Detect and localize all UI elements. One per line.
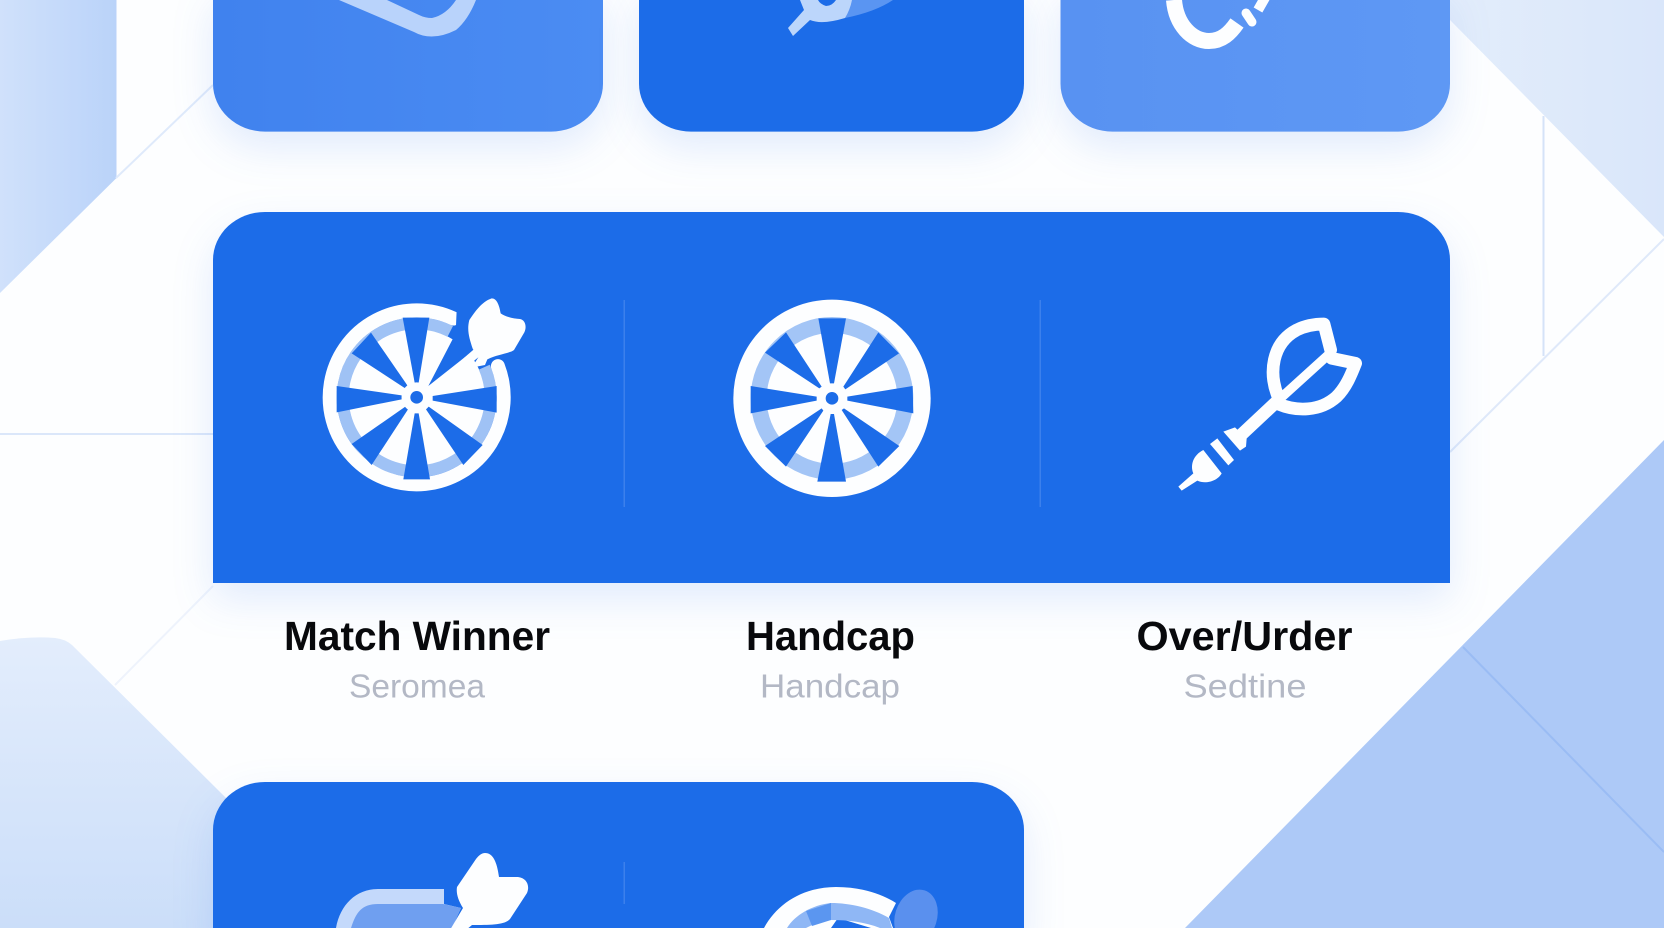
divider: bottom card — [624, 862, 625, 904]
label: Match Winner — [284, 613, 550, 704]
label: Over/Urder: Over/Urder — [1136, 613, 1353, 659]
icon fragment: bottom left dart — [336, 853, 528, 928]
label: Handcap — [746, 613, 915, 704]
panel: bottom market card — [213, 782, 1024, 928]
label: Over/Urder: Sedtine — [1184, 668, 1306, 704]
divider: main card left — [624, 300, 625, 507]
label: Handcap: Handcap — [746, 613, 915, 659]
label: Over/Urder — [1136, 613, 1353, 704]
icon: dartboard with dart — [330, 298, 526, 484]
icon: dartboard — [733, 300, 931, 497]
divider: main card right — [1040, 300, 1041, 507]
background shape: bottom right polygon — [1185, 440, 1664, 928]
background shape: top right polygon — [1450, 0, 1664, 237]
icon fragment: top left card — [339, 0, 476, 37]
panel: top left card — [213, 0, 603, 132]
label: Match Winner: Seromea — [349, 668, 486, 704]
background shape: top left polygon — [0, 0, 116, 293]
label: Handcap: Handcap — [760, 668, 900, 704]
icon fragment: top middle card — [788, 0, 893, 36]
panel: top right card — [1060, 0, 1450, 132]
panel: top middle card — [639, 0, 1024, 132]
background shape: bottom left polygon — [0, 637, 357, 928]
icon: dart — [1178, 324, 1356, 491]
icon fragment: bottom right dartboard — [764, 884, 945, 928]
icon fragment: top right card — [1174, 0, 1266, 41]
panel: main market card — [213, 212, 1450, 583]
label: Match Winner: Match Winner — [284, 613, 550, 659]
